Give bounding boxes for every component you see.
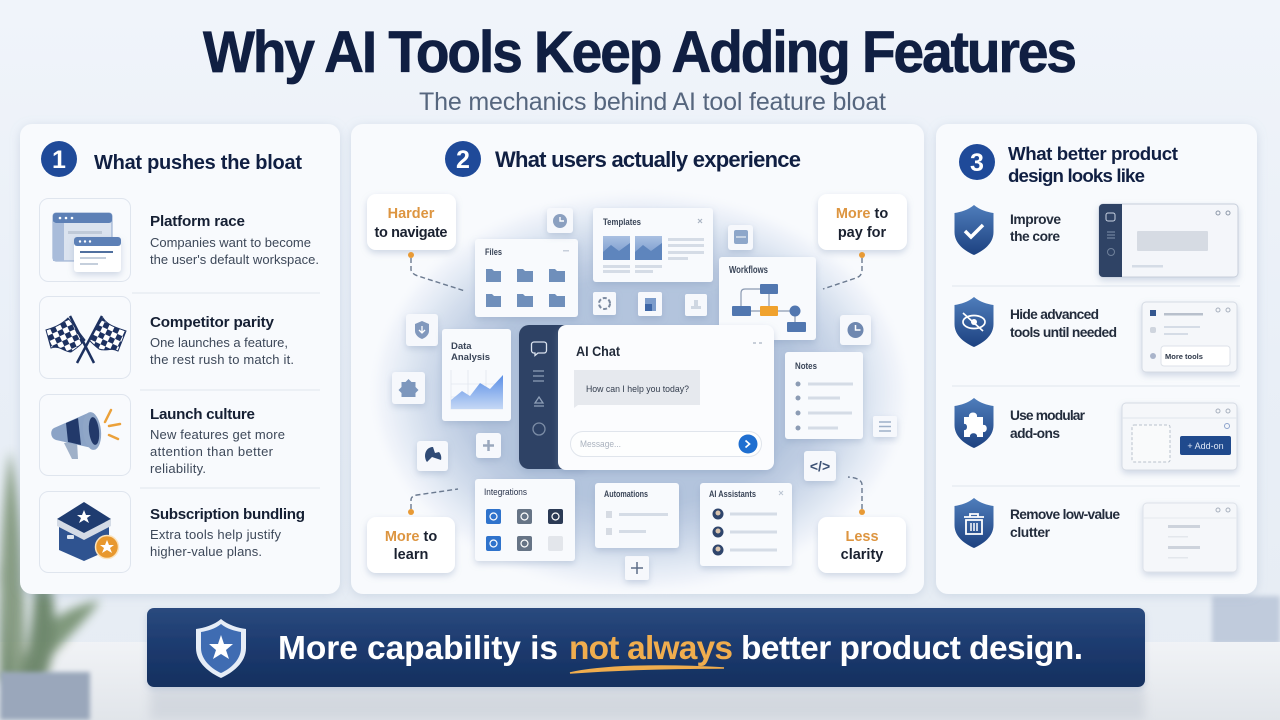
window: templates: Templates bbox=[603, 217, 641, 228]
text: platform race: the user's default workspace. bbox=[150, 252, 319, 267]
mockup: decluttered window bbox=[1143, 503, 1237, 572]
window: data analysis chart bbox=[442, 329, 511, 421]
mockup: more tools menu bbox=[1142, 302, 1237, 372]
icon: overlapping browser windows bbox=[40, 198, 130, 282]
text: hide advanced tools: tools until needed bbox=[1010, 325, 1117, 340]
icon tile: clock right bbox=[840, 315, 871, 345]
icon tile: plus bottom bbox=[625, 556, 649, 580]
icon tile: badge bbox=[392, 372, 425, 404]
icon: subscription box with star bbox=[40, 492, 130, 572]
text: remove low-value clutter bbox=[1010, 507, 1120, 540]
chat title: AI Chat bbox=[576, 344, 620, 359]
chat bubble: How can I help you today? bbox=[586, 384, 689, 395]
icon: shield with puzzle piece bbox=[954, 398, 994, 448]
callout: less clarity: Less bbox=[845, 529, 879, 545]
number badge 3: 3 bbox=[970, 149, 984, 177]
text: launch culture: Launch culture bbox=[150, 406, 255, 423]
takeaway statement: better product design. bbox=[741, 630, 1083, 667]
mockup: add-on button bbox=[1122, 403, 1237, 470]
text: improve the core: Improve bbox=[1010, 212, 1061, 227]
halo: soft blue glow behind windows bbox=[378, 197, 902, 587]
icon tile: upload bbox=[685, 294, 707, 316]
window: data analysis chart: Data bbox=[451, 341, 472, 352]
icon tile: list bbox=[873, 416, 897, 437]
panel: what better product design looks like bbox=[936, 124, 1257, 594]
window: workflows: Workflows bbox=[729, 265, 768, 276]
icon tile: clock bbox=[547, 208, 573, 233]
callout: more to learn bbox=[367, 489, 458, 573]
heading bbox=[1008, 143, 1178, 186]
icon: shield with check bbox=[954, 205, 994, 255]
text: subscription bundling: Extra tools help justify bbox=[150, 527, 282, 542]
text: subscription bundling: higher-value plans. bbox=[150, 544, 262, 559]
callout: harder to navigate: Harder bbox=[388, 206, 435, 222]
text: platform race: Platform race bbox=[150, 213, 245, 230]
callout: harder to navigate: to navigate bbox=[374, 225, 448, 241]
icon tile: code bbox=[804, 451, 836, 481]
message input: Message... bbox=[580, 439, 621, 450]
heading: What pushes the bloat bbox=[94, 152, 302, 174]
subtitle: The mechanics behind AI tool feature bloat bbox=[419, 88, 886, 116]
window: integrations: Integrations bbox=[484, 487, 527, 498]
text: use modular add-ons: add-ons bbox=[1010, 426, 1060, 441]
window: automations: Automations bbox=[604, 489, 648, 499]
icon: crossed checkered flags bbox=[40, 296, 130, 378]
callout: more to learn: More to bbox=[385, 529, 437, 545]
heading: design looks like bbox=[1008, 165, 1145, 186]
heading: What better product bbox=[1008, 143, 1178, 164]
text: competitor parity: Competitor parity bbox=[150, 314, 275, 331]
text: launch culture: New features get more bbox=[150, 427, 285, 442]
window: AI assistants: AI Assistants bbox=[709, 489, 756, 499]
text: launch culture: attention than better bbox=[150, 444, 274, 459]
message input bbox=[570, 432, 762, 456]
panel: what users actually experience bbox=[351, 124, 924, 594]
window: files: Files bbox=[485, 247, 502, 258]
window: workflows bbox=[719, 257, 816, 340]
text: remove low-value clutter: clutter bbox=[1010, 525, 1051, 540]
window: files bbox=[475, 239, 578, 317]
text: remove low-value clutter: Remove low-value bbox=[1010, 507, 1120, 522]
window: notes: Notes bbox=[795, 361, 817, 372]
window: AI chat with sidebar bbox=[519, 325, 774, 470]
text: improve the core bbox=[1010, 212, 1061, 244]
icon tile: recycle bbox=[593, 292, 616, 315]
hand-drawn underline bbox=[570, 666, 724, 673]
callout: harder to navigate bbox=[367, 194, 465, 291]
callout: more to pay for: More to bbox=[836, 206, 888, 222]
window: templates bbox=[593, 208, 713, 282]
takeaway statement bbox=[278, 630, 1083, 667]
window: AI assistants bbox=[700, 483, 792, 566]
mockup: focused core chat window bbox=[1099, 204, 1238, 277]
window: automations bbox=[595, 483, 679, 548]
callout: more to pay for: pay for bbox=[838, 225, 887, 241]
text: use modular add-ons: Use modular bbox=[1010, 408, 1086, 423]
icon tile: pie bbox=[417, 441, 448, 471]
callout: less clarity: clarity bbox=[841, 547, 883, 563]
panel: what pushes the bloat bbox=[20, 124, 340, 594]
number badge 1: 1 bbox=[52, 146, 66, 174]
sidebar icons bbox=[532, 342, 546, 435]
window: notes bbox=[785, 352, 863, 439]
banner: key takeaway bbox=[147, 608, 1145, 687]
icon tile: divide bbox=[728, 225, 753, 250]
number badge 1 bbox=[41, 141, 77, 177]
icon: shield with star bbox=[196, 619, 246, 678]
callout: more to learn: learn bbox=[394, 547, 428, 563]
number badge 2: 2 bbox=[456, 146, 470, 174]
number badge 2 bbox=[445, 141, 481, 177]
callout: more to pay for bbox=[818, 194, 907, 289]
takeaway statement: not always bbox=[569, 630, 733, 667]
text: hide advanced tools: Hide advanced bbox=[1010, 307, 1099, 322]
text: launch culture bbox=[150, 406, 285, 476]
mockup: more tools menu: More tools bbox=[1165, 352, 1203, 361]
window: integrations bbox=[475, 479, 575, 561]
text: improve the core: the core bbox=[1010, 229, 1060, 244]
takeaway statement: More capability is bbox=[278, 630, 558, 667]
text: use modular add-ons bbox=[1010, 408, 1086, 441]
window: data analysis chart: Analysis bbox=[451, 352, 490, 363]
mockup: add-on button: + Add-on bbox=[1187, 441, 1224, 451]
icon tile: shield bbox=[406, 314, 438, 346]
text: competitor parity: One launches a feature, bbox=[150, 335, 288, 350]
chat bubble bbox=[574, 370, 700, 408]
callout: less clarity bbox=[818, 477, 906, 573]
text: platform race bbox=[150, 213, 319, 267]
icon: shield with crossed-out eye bbox=[954, 297, 994, 347]
text: subscription bundling bbox=[150, 506, 305, 559]
text: hide advanced tools bbox=[1010, 307, 1117, 340]
heading: What users actually experience bbox=[495, 147, 801, 172]
text: subscription bundling: Subscription bundling bbox=[150, 506, 305, 523]
icon tile: plus bbox=[476, 433, 501, 458]
title: Why AI Tools Keep Adding Features bbox=[203, 20, 1077, 84]
icon: shield with trash can bbox=[954, 498, 994, 548]
text: competitor parity: the rest rush to match it. bbox=[150, 352, 294, 367]
text: platform race: Companies want to become bbox=[150, 235, 311, 250]
text: competitor parity bbox=[150, 314, 294, 367]
text: launch culture: reliability. bbox=[150, 461, 206, 476]
number badge 3 bbox=[959, 144, 995, 180]
icon tile: code: </> bbox=[810, 458, 830, 474]
icon: megaphone bbox=[40, 394, 130, 476]
icon tile: document bbox=[638, 292, 662, 316]
